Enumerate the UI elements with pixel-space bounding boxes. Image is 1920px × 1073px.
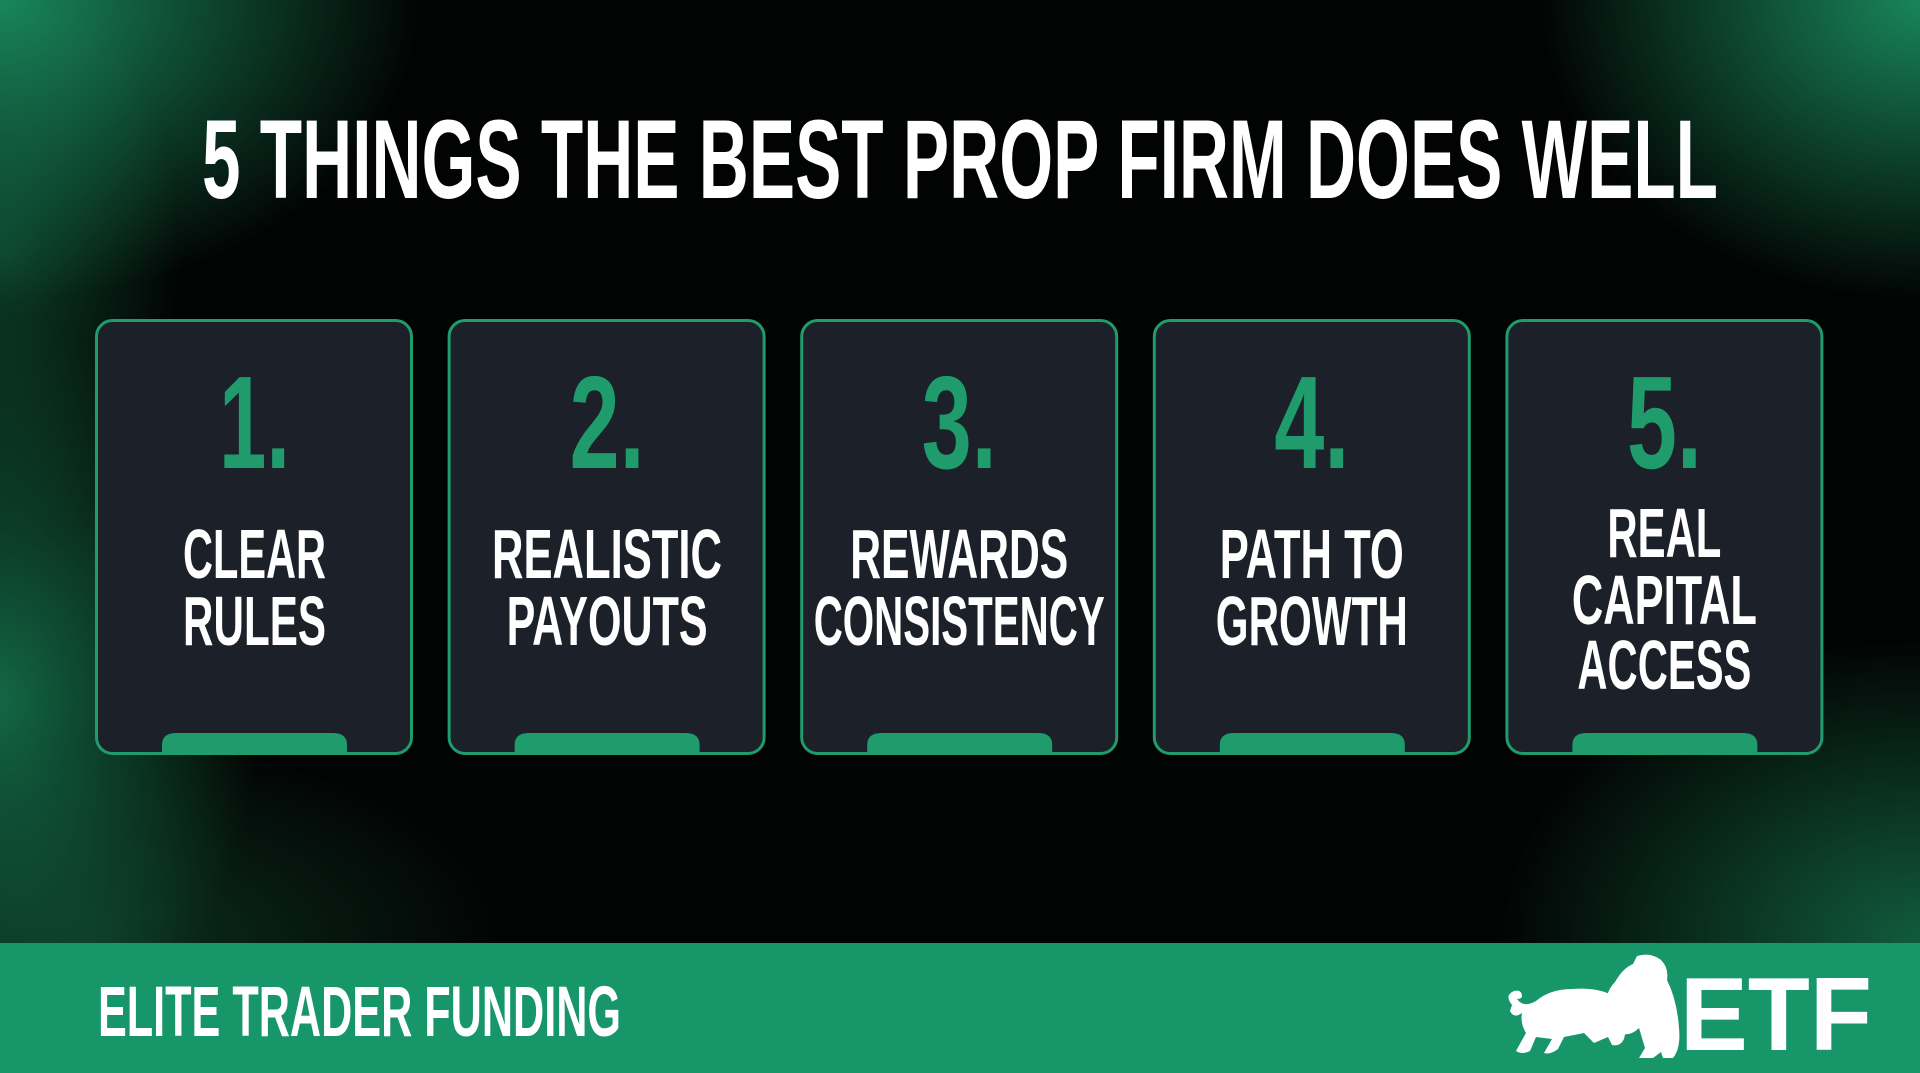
label: path to growth xyxy=(1216,515,1408,660)
label: clear rules: RULES xyxy=(183,582,326,660)
label: rewards consistency xyxy=(814,515,1105,660)
label: clear rules xyxy=(183,515,326,660)
label: path to growth: PATH TO xyxy=(1220,515,1404,593)
label: realistic payouts xyxy=(492,515,722,660)
number 1: 1. xyxy=(219,349,290,496)
card 5: real capital access xyxy=(1507,320,1822,754)
number 5: 5. xyxy=(1627,349,1702,496)
label: real capital access: ACCESS xyxy=(1577,626,1751,704)
logo text ETF: ETF xyxy=(1680,957,1872,1073)
label: rewards consistency: CONSISTENCY xyxy=(814,582,1105,660)
card 2: realistic payouts xyxy=(449,320,764,754)
label: real capital access: CAPITAL xyxy=(1572,561,1757,639)
card 3: rewards consistency xyxy=(802,320,1117,754)
label: clear rules: CLEAR xyxy=(183,515,326,593)
label: real capital access xyxy=(1572,494,1757,704)
number 3: 3. xyxy=(922,349,997,496)
card 4: path to growth xyxy=(1154,320,1469,754)
label: realistic payouts: REALISTIC xyxy=(492,515,722,593)
card 1: clear rules xyxy=(96,320,412,754)
label: realistic payouts: PAYOUTS xyxy=(507,582,708,660)
label: rewards consistency: REWARDS xyxy=(850,515,1068,593)
icon: bull and bear logo xyxy=(1508,955,1679,1058)
footer brand text: ELITE TRADER FUNDING xyxy=(98,973,621,1052)
number 4: 4. xyxy=(1274,349,1349,496)
label: path to growth: GROWTH xyxy=(1216,582,1408,660)
footer bar xyxy=(0,943,1920,1073)
number 2: 2. xyxy=(570,349,645,496)
label: real capital access: REAL xyxy=(1607,494,1721,572)
